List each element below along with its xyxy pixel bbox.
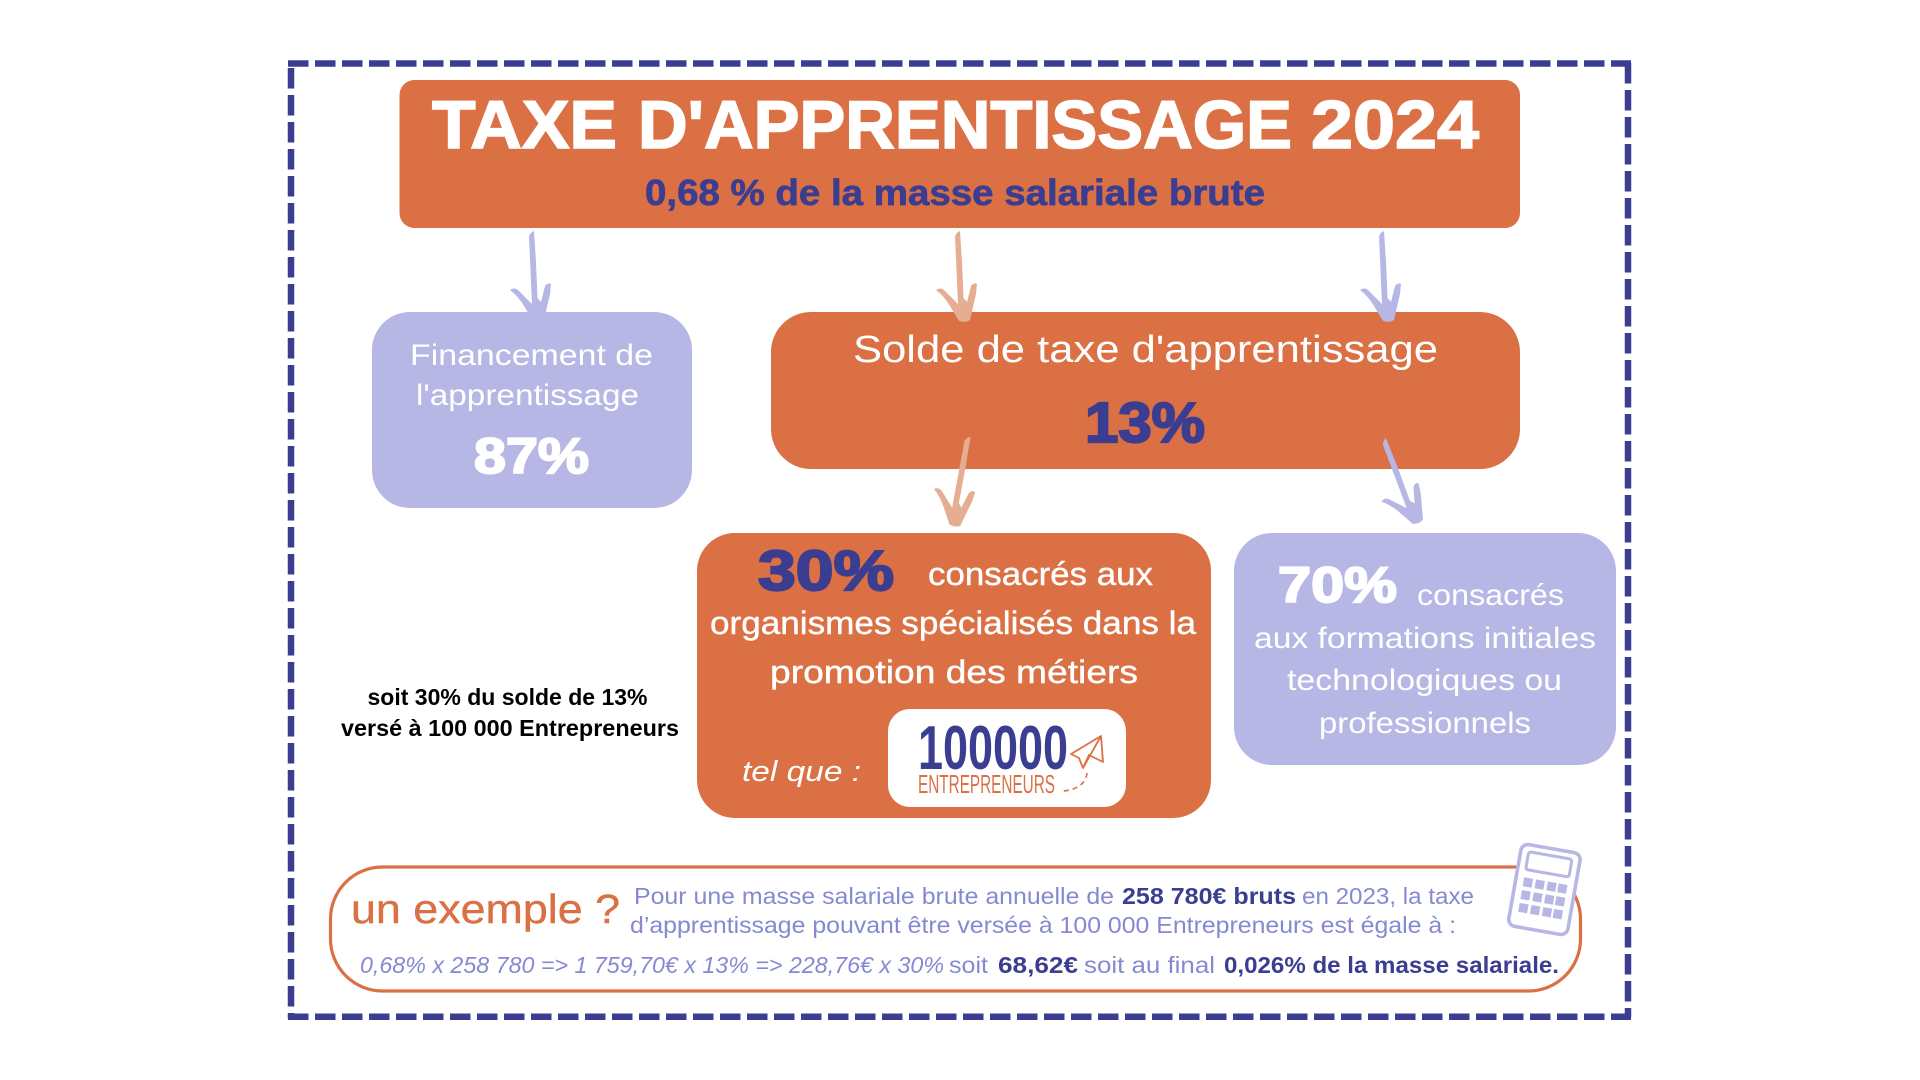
label: solde: Solde de taxe d'apprentissage bbox=[853, 329, 1438, 371]
arrow: solde to 70% bbox=[1363, 433, 1430, 532]
soit: soit bbox=[949, 952, 989, 978]
label: financement: Financement de bbox=[410, 339, 653, 372]
example line 1 start: Pour une masse salariale brute annuelle de bbox=[634, 883, 1114, 909]
dashed flight path bbox=[1063, 773, 1087, 791]
arrow: title to financement bbox=[510, 231, 551, 322]
title: D'APPRENTISSAGE bbox=[638, 87, 1292, 163]
logo word: ENTREPRENEURS bbox=[918, 769, 1055, 799]
example line 1 end: en 2023, la taxe bbox=[1302, 883, 1474, 909]
panel: financement 87% bbox=[372, 312, 692, 508]
text: consacrés: consacrés bbox=[1417, 579, 1564, 612]
value 70%: 70% bbox=[1278, 557, 1397, 613]
arrow: title to solde second bbox=[1360, 231, 1401, 322]
icon: calculator bbox=[1508, 843, 1581, 936]
text: professionnels: professionnels bbox=[1319, 707, 1531, 740]
text: promotion: promotion des métiers bbox=[770, 654, 1138, 690]
panel: 30% organismes bbox=[697, 533, 1211, 818]
soit au final: soit au final bbox=[1084, 952, 1215, 978]
title: 2024 bbox=[1311, 87, 1479, 163]
panel: example bbox=[330, 867, 1580, 991]
icon: paper plane bbox=[1071, 736, 1103, 768]
text: tel que: tel que : bbox=[742, 756, 861, 788]
text: consacrés aux: consacrés aux bbox=[928, 556, 1153, 592]
panel: title bbox=[400, 80, 1520, 228]
heading: un exemple: un exemple ? bbox=[351, 886, 620, 932]
logo number: 100000 bbox=[918, 714, 1068, 783]
value 30%: 30% bbox=[758, 539, 894, 603]
example amount: 258 780€ bruts bbox=[1122, 883, 1296, 909]
text: formations: aux formations initiales bbox=[1254, 622, 1596, 655]
example line 2: d’apprentissage pouvant être versée à 100 000 Entrepreneurs est égale à : bbox=[630, 912, 1456, 938]
title bbox=[432, 87, 1479, 163]
title: TAXE bbox=[432, 87, 617, 163]
panel: solde 13% bbox=[771, 312, 1520, 469]
note line 2: versé à 100 000 Entrepreneurs bbox=[341, 715, 679, 741]
value 87%: 87% bbox=[474, 428, 589, 484]
panel: 70% formations bbox=[1234, 533, 1616, 765]
calculation: 0,68% x 258 780 => 1 759,70€ x 13% => 228,76€ x 30% bbox=[360, 952, 944, 978]
arrow: solde to 30% bbox=[927, 431, 987, 529]
logo: 100000 entrepreneurs bbox=[888, 709, 1126, 807]
result percentage: 0,026% de la masse salariale. bbox=[1224, 952, 1559, 978]
note: soit 30% bbox=[341, 684, 679, 741]
text: technologiques: technologiques ou bbox=[1287, 664, 1562, 697]
dashed frame bbox=[288, 63, 1631, 1019]
result amount: 68,62€ bbox=[998, 952, 1078, 978]
arrow: title to solde bbox=[936, 231, 977, 322]
text: organismes: organismes spécialisés dans la bbox=[710, 605, 1196, 641]
subtitle: 0,68 % de la masse salariale brute bbox=[645, 172, 1265, 213]
value 13%: 13% bbox=[1085, 391, 1205, 455]
note line 1: soit 30% du solde de 13% bbox=[368, 684, 648, 710]
label: apprentissage: l'apprentissage bbox=[416, 379, 639, 412]
